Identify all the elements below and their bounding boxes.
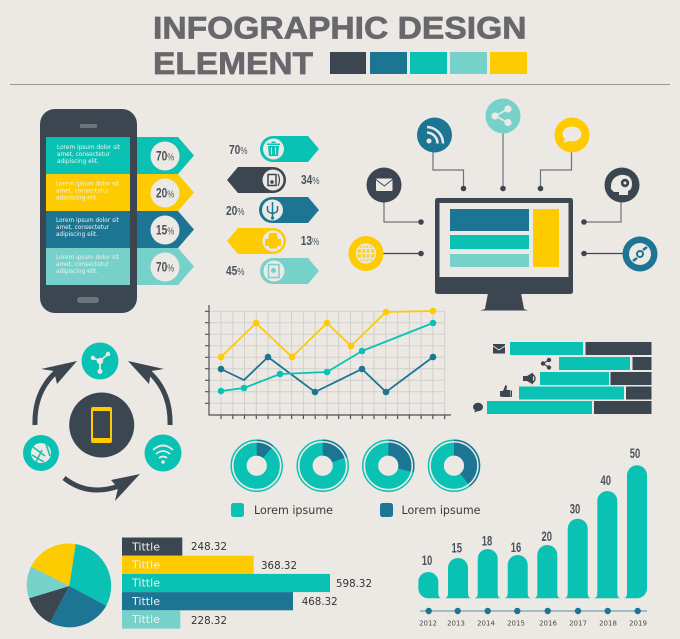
year labels: 2014	[477, 620, 495, 628]
icon: brain gear	[604, 168, 640, 202]
column values: 16	[511, 540, 522, 555]
bar values	[191, 540, 372, 627]
phone band text	[56, 144, 121, 275]
bar labels: Tittle	[131, 576, 160, 590]
pill: hard drive	[260, 258, 319, 284]
bar values: 598.32	[336, 577, 372, 590]
phone body	[40, 109, 137, 313]
donut 4	[428, 440, 480, 491]
column values: 10	[422, 553, 432, 568]
icon: small mail	[493, 344, 505, 354]
donut 1	[231, 440, 282, 491]
column values: 50	[630, 446, 640, 461]
phone band text: adipiscing elit.	[56, 268, 98, 275]
bar values: 468.32	[302, 595, 338, 608]
legend: Lorem ipsume	[254, 503, 333, 517]
icon: small chat	[473, 403, 483, 412]
bar values: 248.32	[191, 540, 227, 553]
title	[153, 10, 526, 81]
arrow: bottom curve	[64, 474, 140, 501]
icon: globe ball	[23, 435, 59, 471]
icon: small thumbs up	[500, 385, 512, 397]
bar values: 368.32	[261, 559, 297, 572]
year labels: 2015	[507, 620, 525, 628]
icon: globe	[348, 236, 384, 271]
phone band text: adipiscing elit.	[57, 158, 99, 165]
pill percentages: 13%	[301, 234, 320, 248]
pill: trash	[260, 136, 319, 162]
phone band text: amet, consectetur	[56, 224, 110, 231]
phone band text: Lorem ipsum dolor sit	[56, 254, 120, 261]
phone band text: adipiscing elit.	[56, 194, 98, 202]
pill percentages: 70%	[229, 143, 248, 157]
panel: icon pills	[226, 136, 320, 284]
series: blue	[218, 354, 436, 395]
phone arrow tabs	[130, 137, 194, 285]
phone band text: Lorem ipsum dolor sit	[57, 144, 121, 151]
bar labels	[131, 540, 160, 626]
phone band text: amet, consectetur	[57, 151, 111, 158]
stacked bar chart with icons	[473, 342, 652, 414]
pill: usb	[259, 197, 319, 223]
phone band text: amet, consectetur	[56, 261, 110, 268]
year labels	[419, 620, 647, 628]
donut charts	[231, 440, 480, 491]
series: yellow	[218, 308, 436, 360]
panel: cycle diagram	[23, 342, 182, 501]
phone percentages	[156, 148, 174, 275]
icon: speech bubble	[554, 118, 590, 152]
timeline	[420, 608, 647, 614]
year labels: 2016	[539, 620, 557, 628]
columns	[418, 465, 647, 598]
year labels: 2019	[629, 620, 647, 628]
line chart	[205, 305, 451, 419]
icon: small speaker	[523, 372, 535, 384]
monitor	[435, 198, 573, 310]
phone band text: adipiscing elit.	[56, 231, 98, 238]
column values: 20	[541, 529, 552, 544]
pill percentages	[226, 143, 320, 278]
column values: 30	[570, 502, 580, 517]
series: teal	[218, 320, 436, 394]
phone band text: amet, consectetur	[56, 188, 110, 194]
year labels: 2013	[447, 620, 465, 628]
pill percentages: 45%	[226, 264, 245, 278]
phone screen bands	[46, 137, 130, 285]
panel: monitor network	[348, 98, 658, 310]
year labels: 2012	[419, 620, 437, 628]
donut 3	[363, 440, 414, 491]
icon: wifi	[144, 434, 182, 472]
pill percentages: 34%	[301, 173, 320, 187]
icon: rss	[417, 118, 452, 152]
bar values: 228.32	[191, 614, 227, 627]
phone band text: Lorem ipsum dolor sit	[56, 180, 120, 188]
pill: printer	[227, 228, 286, 254]
phone percentages: 20%	[156, 185, 174, 201]
phone band text: Lorem ipsum dolor sit	[56, 217, 120, 224]
colour swatches	[330, 52, 527, 74]
center circle with phone	[69, 392, 134, 458]
connector lines	[380, 132, 625, 254]
bar labels: Tittle	[131, 540, 160, 554]
legend: Lorem ipsume	[402, 503, 480, 517]
bar labels: Tittle	[131, 613, 160, 626]
legend	[231, 503, 480, 517]
pie chart	[27, 543, 111, 627]
phone percentages: 70%	[156, 259, 174, 275]
arrow: right curve	[128, 361, 170, 425]
column values	[422, 446, 640, 568]
arrow: left curve	[35, 361, 77, 425]
horizontal bar chart	[122, 538, 372, 629]
phone percentages: 15%	[156, 222, 174, 238]
icon: small share	[541, 358, 551, 370]
column chart	[418, 446, 647, 628]
year labels: 2018	[599, 620, 617, 628]
horizontal bars	[122, 538, 330, 629]
icon: network node	[82, 342, 118, 380]
donut 2	[297, 440, 348, 491]
stacked bars	[487, 342, 652, 414]
phone percentages: 70%	[156, 148, 174, 164]
column values: 15	[451, 541, 462, 556]
column values: 40	[600, 473, 611, 488]
phone speaker	[80, 124, 97, 128]
chart grid	[209, 311, 445, 415]
pill: music player	[227, 167, 286, 193]
title: ELEMENT	[153, 45, 313, 81]
year labels: 2017	[569, 620, 587, 628]
column values: 18	[482, 534, 493, 549]
bar labels: Tittle	[131, 595, 160, 608]
chart axes	[205, 305, 451, 419]
connector dots	[418, 186, 587, 256]
icon: disc	[622, 236, 658, 272]
bar labels: Tittle	[131, 558, 160, 572]
panel: phone infographic	[40, 109, 194, 313]
title: INFOGRAPHIC DESIGN	[153, 10, 526, 46]
phone home button	[77, 297, 99, 303]
icon: share	[486, 98, 520, 134]
icon: mail	[366, 168, 402, 202]
pill percentages: 20%	[226, 204, 245, 218]
